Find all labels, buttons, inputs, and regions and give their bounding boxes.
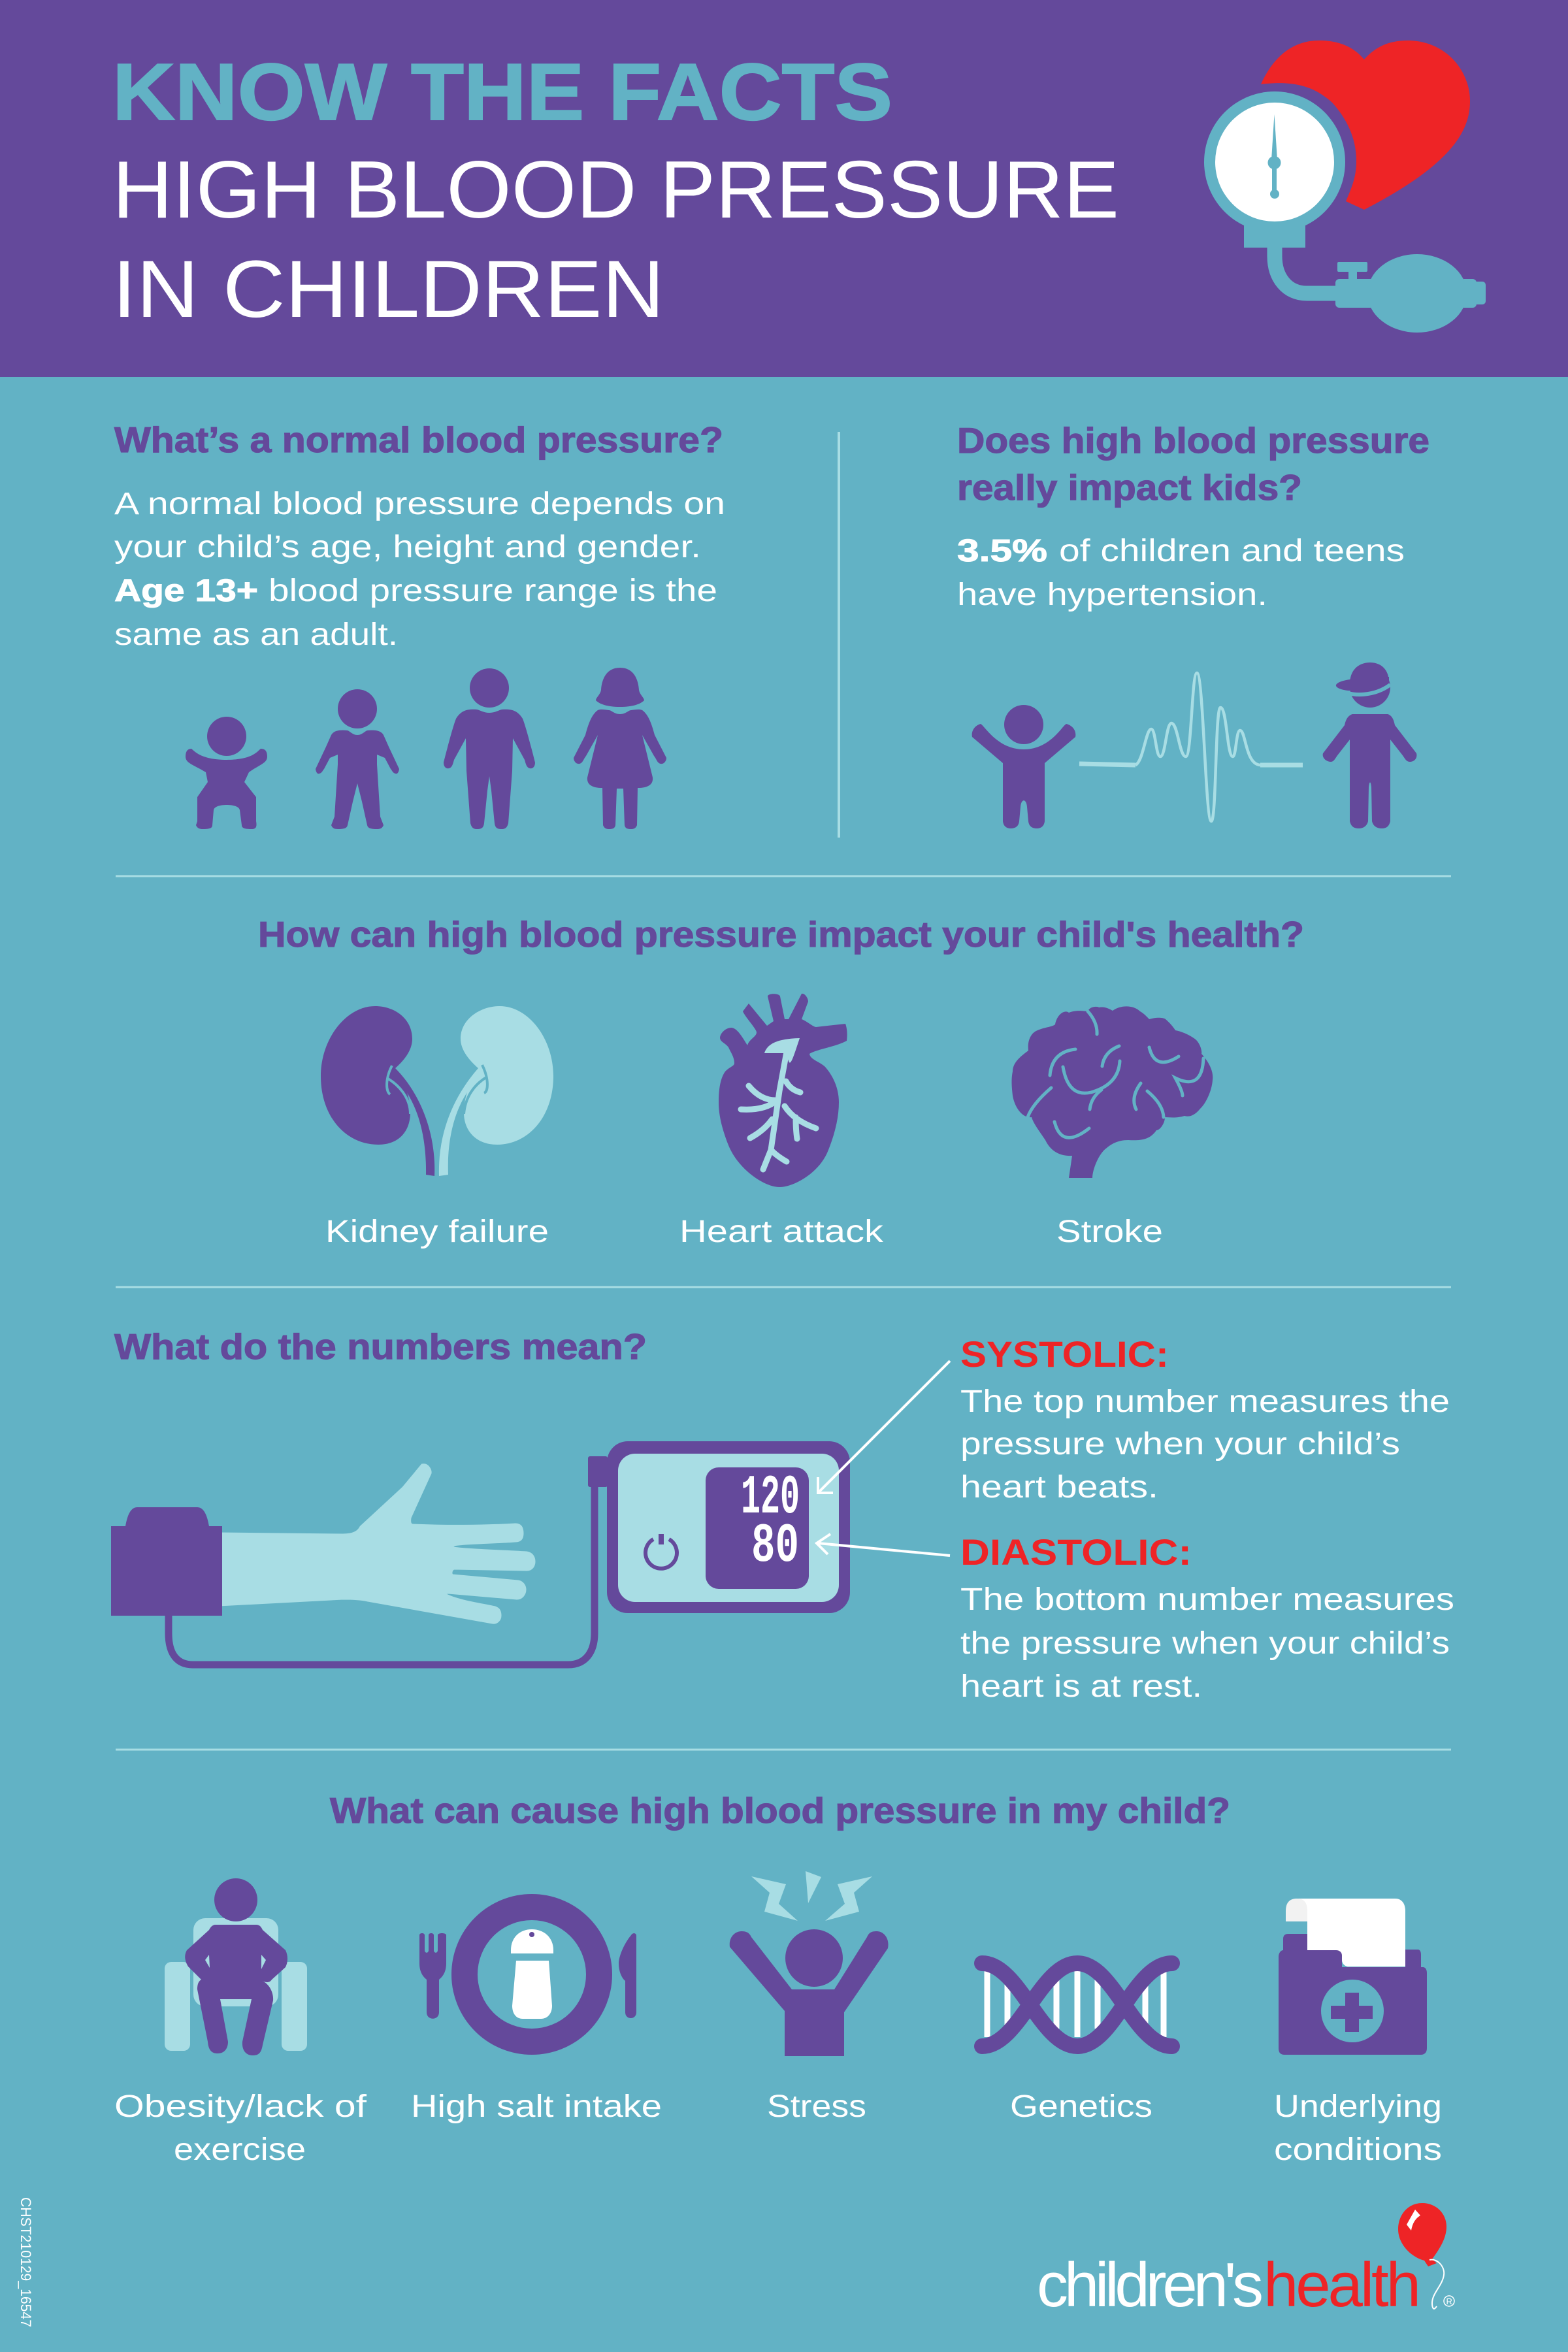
label: heart attack: Heart attack — [679, 1215, 884, 1249]
icon: teen with cap — [1323, 662, 1416, 828]
arrow: to diastolic reading — [817, 1534, 950, 1556]
registered mark — [1444, 2296, 1454, 2306]
icon: knife — [619, 1933, 636, 2018]
icon: DNA helix — [982, 1963, 1172, 2046]
job code: CHST210129_16547 — [18, 2197, 34, 2327]
logo: children's health: health — [1264, 2250, 1421, 2320]
heading: normal blood pressure: What’s a normal blood pressure? — [114, 419, 723, 460]
icon: balloon — [1398, 2203, 1446, 2309]
label: underlying conditions: conditions — [1274, 2132, 1442, 2167]
panel: impact on kids — [957, 420, 1429, 828]
icon: kidneys — [321, 1006, 553, 1176]
label: obesity — [114, 2089, 367, 2167]
text block: systolic: SYSTOLIC: — [960, 1333, 1169, 1375]
title — [112, 48, 1119, 335]
divider — [116, 1286, 1451, 1288]
text block: normal blood pressure explanation: blood pressure range is the — [269, 574, 717, 608]
text block: hypertension statistic: have hypertension. — [957, 578, 1267, 612]
icon: brain — [1011, 1006, 1213, 1178]
icon: arm with cuff and monitor — [111, 1441, 850, 1665]
text block: diastolic: DIASTOLIC: — [960, 1531, 1192, 1573]
divider — [116, 875, 1451, 877]
label: stroke: Stroke — [1056, 1215, 1163, 1249]
heading: health impacts: How can high blood pressure impact your child's health? — [258, 914, 1304, 955]
text block: systolic: pressure when your child’s — [960, 1427, 1400, 1462]
text block: hypertension statistic: of children and teens — [1059, 534, 1405, 568]
label: kidney failure: Kidney failure — [325, 1215, 549, 1249]
text block: normal blood pressure explanation: Age 13+ — [114, 574, 258, 608]
text block: systolic — [960, 1333, 1450, 1505]
heading: what do the numbers mean: What do the numbers mean? — [114, 1326, 647, 1367]
chart: heartbeat line — [1079, 673, 1303, 821]
arrow: to systolic reading — [818, 1361, 950, 1493]
label: genetics: Genetics — [1010, 2089, 1152, 2124]
icon: power button — [645, 1534, 677, 1569]
text block: normal blood pressure explanation — [114, 487, 725, 652]
panel: health impacts — [258, 914, 1304, 1249]
label: stress: Stress — [767, 2089, 866, 2124]
text block: diastolic — [960, 1531, 1454, 1704]
registered mark: R — [1446, 2296, 1452, 2306]
title: KNOW THE FACTS — [112, 48, 892, 137]
heading: does high blood pressure impact kids — [957, 420, 1429, 508]
text block: normal blood pressure explanation: same as an adult. — [114, 617, 398, 652]
text block: normal blood pressure explanation: your child’s age, height and gender. — [114, 530, 701, 564]
divider — [838, 432, 840, 838]
reading: 120 over 80: 120 — [741, 1467, 800, 1529]
icon: heart — [719, 994, 847, 1187]
heading: does high blood pressure impact kids: Does high blood pressure — [957, 420, 1429, 461]
icon: heart and blood pressure gauge — [1204, 41, 1486, 333]
title: HIGH BLOOD PRESSURE — [112, 145, 1119, 235]
icon: fork — [419, 1933, 446, 2019]
label: obesity: Obesity/lack of — [114, 2089, 367, 2124]
reading: 120 over 80: 80 — [751, 1516, 799, 1578]
logo: children's health: children's — [1037, 2250, 1264, 2320]
icon: medical folder — [1279, 1899, 1427, 2055]
heading: causes: What can cause high blood pressure in my child? — [330, 1790, 1230, 1831]
label: salt: High salt intake — [411, 2089, 662, 2124]
icon: stressed person — [730, 1871, 889, 2056]
header band — [0, 0, 1568, 377]
title: IN CHILDREN — [112, 244, 664, 335]
icon: plate with salt shaker — [419, 1907, 636, 2042]
panel: causes — [114, 1790, 1442, 2167]
text block: hypertension statistic: 3.5% — [957, 534, 1047, 568]
heading: does high blood pressure impact kids: really impact kids? — [957, 467, 1302, 508]
text block: normal blood pressure explanation: A normal blood pressure depends on — [114, 487, 725, 521]
icon: person sitting in chair — [165, 1878, 307, 2055]
icon: four children of increasing age — [186, 668, 666, 829]
label: underlying conditions: Underlying — [1274, 2089, 1442, 2124]
text block: diastolic: the pressure when your child’s — [960, 1626, 1450, 1661]
label: obesity: exercise — [174, 2132, 306, 2167]
divider — [116, 1748, 1451, 1751]
reading: 120 over 80 — [741, 1467, 800, 1578]
label: underlying conditions — [1274, 2089, 1442, 2167]
panel: numbers — [111, 1326, 1454, 1704]
text block: systolic: The top number measures the — [960, 1384, 1450, 1419]
panel: normal blood pressure — [114, 419, 725, 829]
text block: diastolic: The bottom number measures — [960, 1582, 1454, 1617]
icon: child with raised arms — [972, 705, 1075, 828]
text block: hypertension statistic — [957, 534, 1405, 612]
text block: systolic: heart beats. — [960, 1470, 1158, 1505]
text block: diastolic: heart is at rest. — [960, 1669, 1202, 1704]
logo: children's health — [1037, 2203, 1454, 2320]
